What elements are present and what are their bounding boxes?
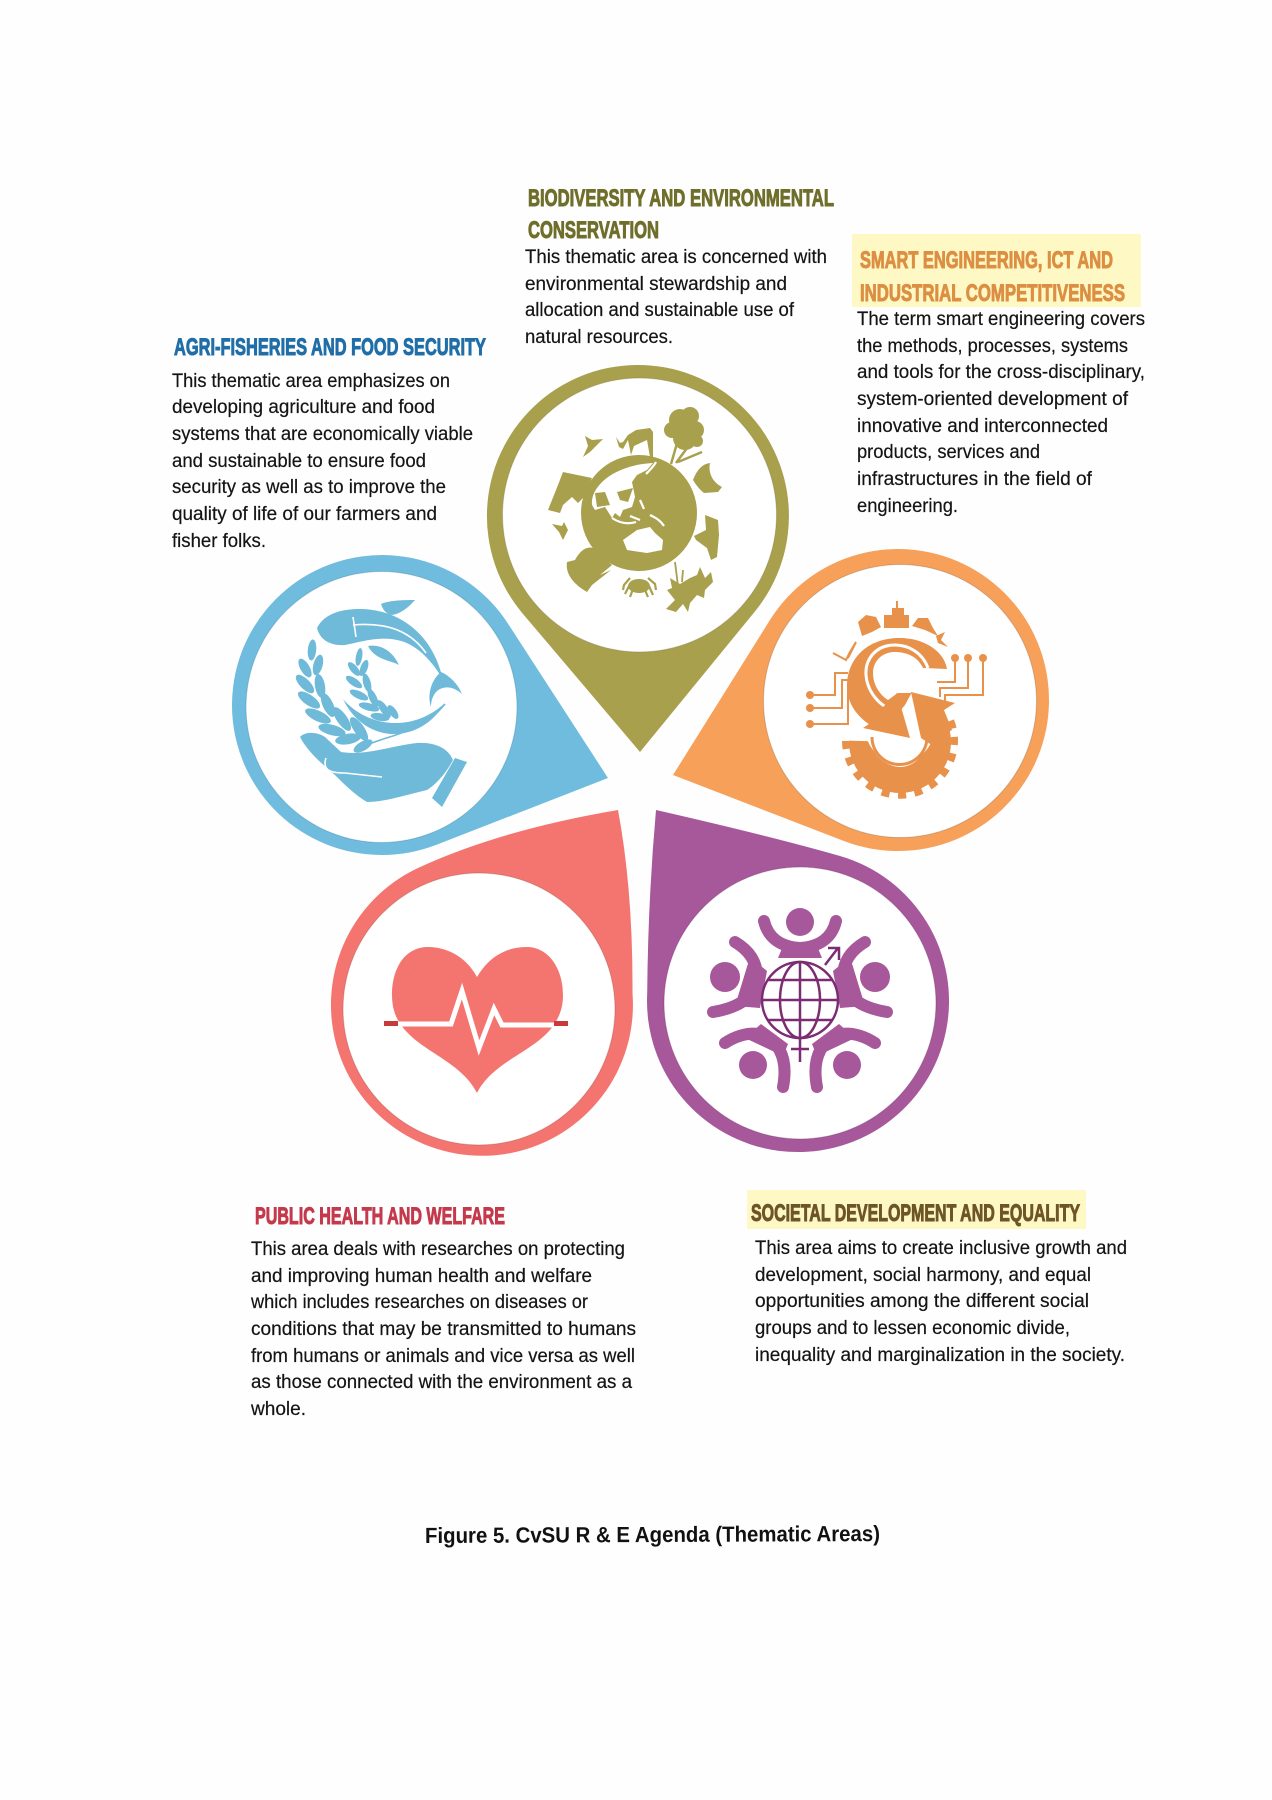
heading: smart engineering with highlight: SMART ENGINEERING, ICT AND xyxy=(860,247,1113,274)
heading: societal development with highlight xyxy=(747,1190,1086,1229)
heading: smart engineering with highlight: INDUSTRIAL COMPETITIVENESS xyxy=(860,280,1125,307)
text block: agri-fisheries description: fisher folks. xyxy=(172,531,266,552)
panel: smart engineering pin xyxy=(673,549,1049,851)
text block: agri-fisheries description: quality of life of our farmers and xyxy=(172,504,437,525)
panel: societal development pin xyxy=(647,810,949,1152)
icon: S gear with circuits xyxy=(806,601,987,795)
text block: public health description: which includes researches on diseases or xyxy=(250,1292,589,1313)
pin shape: blue xyxy=(232,555,608,855)
panel: biodiversity pin xyxy=(487,365,789,752)
text block: smart engineering description: system-oriented development of xyxy=(857,389,1129,410)
text block: societal development description: groups and to lessen economic divide, xyxy=(755,1318,1070,1339)
text block: biodiversity description: This thematic area is concerned with xyxy=(525,247,827,268)
pin shape: orange xyxy=(673,549,1049,851)
text block: smart engineering description: The term smart engineering covers xyxy=(857,309,1145,330)
heading: agri-fisheries and food security: AGRI-FISHERIES AND FOOD SECURITY xyxy=(174,334,486,361)
panel: public health pin xyxy=(331,810,633,1156)
text block: societal development description: This area aims to create inclusive growth and xyxy=(755,1238,1127,1259)
heading: biodiversity and environmental conservation: CONSERVATION xyxy=(528,217,659,244)
text block: agri-fisheries description: security as well as to improve the xyxy=(172,477,446,498)
text block: smart engineering description: and tools for the cross-disciplinary, xyxy=(857,362,1145,383)
text block: agri-fisheries description: systems that are economically viable xyxy=(172,424,473,445)
text block: public health description: and improving human health and welfare xyxy=(251,1266,592,1287)
heading: smart engineering with highlight xyxy=(852,234,1141,307)
text block: smart engineering description: innovative and interconnected xyxy=(857,416,1108,437)
text block: societal development description: inequality and marginalization in the society. xyxy=(755,1345,1125,1366)
text block: public health description: as those connected with the environment as a xyxy=(251,1372,632,1393)
text block: public health description: whole. xyxy=(250,1399,306,1420)
text block: smart engineering description: the methods, processes, systems xyxy=(857,336,1128,357)
text block: agri-fisheries description: and sustainable to ensure food xyxy=(172,451,426,472)
heading: biodiversity and environmental conservation xyxy=(528,185,834,244)
icon: people around globe xyxy=(710,908,890,1087)
text block: agri-fisheries description xyxy=(172,371,473,552)
text block: smart engineering description: infrastructures in the field of xyxy=(857,469,1093,490)
icon: globe with animals xyxy=(548,407,722,612)
text block: agri-fisheries description: developing agriculture and food xyxy=(172,397,435,418)
text block: societal development description xyxy=(755,1238,1127,1366)
text block: public health description: from humans or animals and vice versa as well xyxy=(251,1346,635,1367)
text block: public health description: This area deals with researches on protecting xyxy=(251,1239,625,1260)
text block: smart engineering description: engineering. xyxy=(857,496,958,517)
icon: fish wheat and hand xyxy=(293,600,467,807)
heading: societal development with highlight: SOCIETAL DEVELOPMENT AND EQUALITY xyxy=(751,1200,1080,1227)
text block: biodiversity description: allocation and sustainable use of xyxy=(525,300,795,321)
text block: smart engineering description xyxy=(857,309,1145,517)
pin shape: purple xyxy=(647,810,949,1152)
text block: agri-fisheries description: This thematic area emphasizes on xyxy=(172,371,450,392)
text block: societal development description: development, social harmony, and equal xyxy=(755,1265,1091,1286)
figure caption: Figure 5. CvSU R & E Agenda (Thematic Areas) xyxy=(425,1521,880,1548)
text block: biodiversity description: environmental stewardship and xyxy=(525,274,787,295)
icon: heart with pulse line xyxy=(384,947,568,1093)
pin shape: olive xyxy=(487,365,789,752)
text block: public health description xyxy=(250,1239,636,1420)
pin shape: red xyxy=(331,810,633,1156)
text block: biodiversity description xyxy=(525,247,827,348)
text block: societal development description: opportunities among the different social xyxy=(755,1291,1089,1312)
heading: biodiversity and environmental conservation: BIODIVERSITY AND ENVIRONMENTAL xyxy=(528,185,834,212)
text block: public health description: conditions that may be transmitted to humans xyxy=(251,1319,636,1340)
panel: agri-fisheries pin xyxy=(232,555,608,855)
text block: biodiversity description: natural resources. xyxy=(525,327,673,348)
heading: public health and welfare: PUBLIC HEALTH AND WELFARE xyxy=(255,1203,505,1230)
text block: smart engineering description: products, services and xyxy=(857,442,1040,463)
